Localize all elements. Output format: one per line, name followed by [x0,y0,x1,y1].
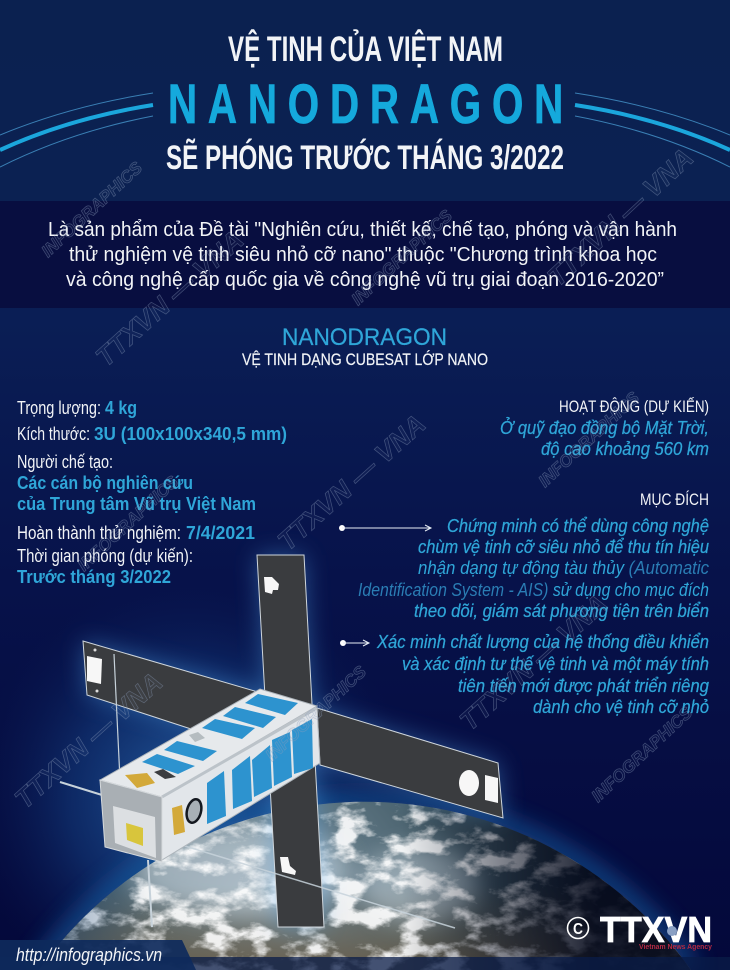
logo: TTXVN: TTXVN [600,909,712,950]
arrow 2 [340,640,369,646]
watermarks: INFOGRAPHICS [74,472,183,575]
title block [166,29,564,177]
launch time [17,546,193,587]
purpose heading: MỤC ĐÍCH [640,490,709,509]
weight: 4 kg [105,398,137,418]
intro text [48,218,677,291]
subheading: VỆ TINH DẠNG CUBESAT LỚP NANO [242,350,488,369]
purpose text 1: nhận dạng tự động tàu thủy (Automatic [418,558,709,578]
purpose text 1 [358,516,709,621]
purpose text 2 [376,632,709,717]
purpose text 1: chùm vệ tinh cỡ siêu nhỏ để thu tín hiệu [418,537,709,557]
heading NANODRAGON: NANODRAGON [282,324,447,351]
panel: purpose [339,490,709,717]
watermarks: TTXVN — VNA [454,589,613,736]
maker: Các cán bộ nghiên cứu [17,473,193,493]
panel: intro band [0,201,730,308]
purpose text 2: Xác minh chất lượng của hệ thống điều khiển [376,632,709,652]
size: Kích thước: [17,424,90,444]
watermarks: TTXVN — VNA [272,409,431,556]
operation text [500,417,709,459]
watermarks: TTXVN — VNA [9,667,168,814]
title line 3: SẼ PHÓNG TRƯỚC THÁNG 3/2022 [166,139,564,177]
watermarks: TTXVN — VNA [542,143,699,292]
launch time: Trước tháng 3/2022 [17,567,171,587]
purpose text 1: theo dõi, giám sát phương tiện trên biển [414,601,709,621]
watermarks: INFOGRAPHICS [262,662,371,765]
panel glow [83,555,503,927]
operation text: độ cao khoảng 560 km [541,439,709,459]
launch time: Thời gian phóng (dự kiến): [17,546,193,566]
watermarks: TTXVN — VNA [90,225,249,372]
title line 1: VỆ TINH CỦA VIỆT NAM [228,29,503,69]
watermarks [9,143,699,814]
watermarks: INFOGRAPHICS [38,158,147,261]
url label: http://infographics.vn [16,945,162,965]
title NANODRAGON: NANODRAGON [168,74,563,136]
solar panel: right [317,708,503,818]
weight: Trọng lượng: [17,398,101,418]
watermarks: INFOGRAPHICS [348,206,457,309]
satellite [60,555,503,928]
watermarks: INFOGRAPHICS [535,388,644,491]
body side face [162,708,320,860]
purpose text 2: tiên tiến mới được phát triển riêng [458,676,709,696]
maker: Người chế tạo: [17,452,113,472]
operation text: Ở quỹ đạo đồng bộ Mặt Trời, [500,417,709,438]
intro text: và công nghệ cấp quốc gia về công nghệ vũ trụ giai đoạn 2016-2020” [66,268,664,291]
purpose text 2: dành cho vệ tinh cỡ nhỏ [533,697,709,717]
glow behind satellite [0,560,420,970]
purpose text 1: Identification System - AIS) sử dụng cho mục đích [358,580,709,600]
maker: của Trung tâm Vũ trụ Việt Nam [17,494,256,514]
test completion: Hoàn thành thử nghiệm: [17,523,181,543]
intro text: Là sản phẩm của Đề tài "Nghiên cứu, thiết kế, chế tạo, phóng và vận hành [48,218,677,241]
intro text: thử nghiệm vệ tinh siêu nhỏ cỡ nano" thuộc "Chương trình khoa học [69,243,657,266]
purpose text 2: và xác định tư thế vệ tinh và một máy tính [402,654,709,674]
solar panel: vertical [257,555,324,927]
purpose text 1: Chứng minh có thể dùng công nghệ [447,516,709,536]
url label [0,940,196,970]
earth [30,800,700,970]
panel: operation [500,397,709,459]
logo: TTXVN: C [573,921,583,938]
maker [17,452,256,514]
footer bar [0,957,730,970]
body top face [100,689,317,797]
size: 3U (100x100x340,5 mm) [94,424,287,444]
test completion: 7/4/2021 [186,523,255,543]
body front face [100,780,162,862]
logo: TTXVN: Vietnam News Agency [639,944,712,951]
panel: specifications [17,398,287,587]
solar panel: left [83,641,258,745]
size [17,424,287,444]
antennas [60,654,455,928]
arrow 1 [339,525,431,531]
decorative arcs [0,93,730,167]
watermarks: INFOGRAPHICS [588,703,697,806]
subheading block [242,324,488,369]
